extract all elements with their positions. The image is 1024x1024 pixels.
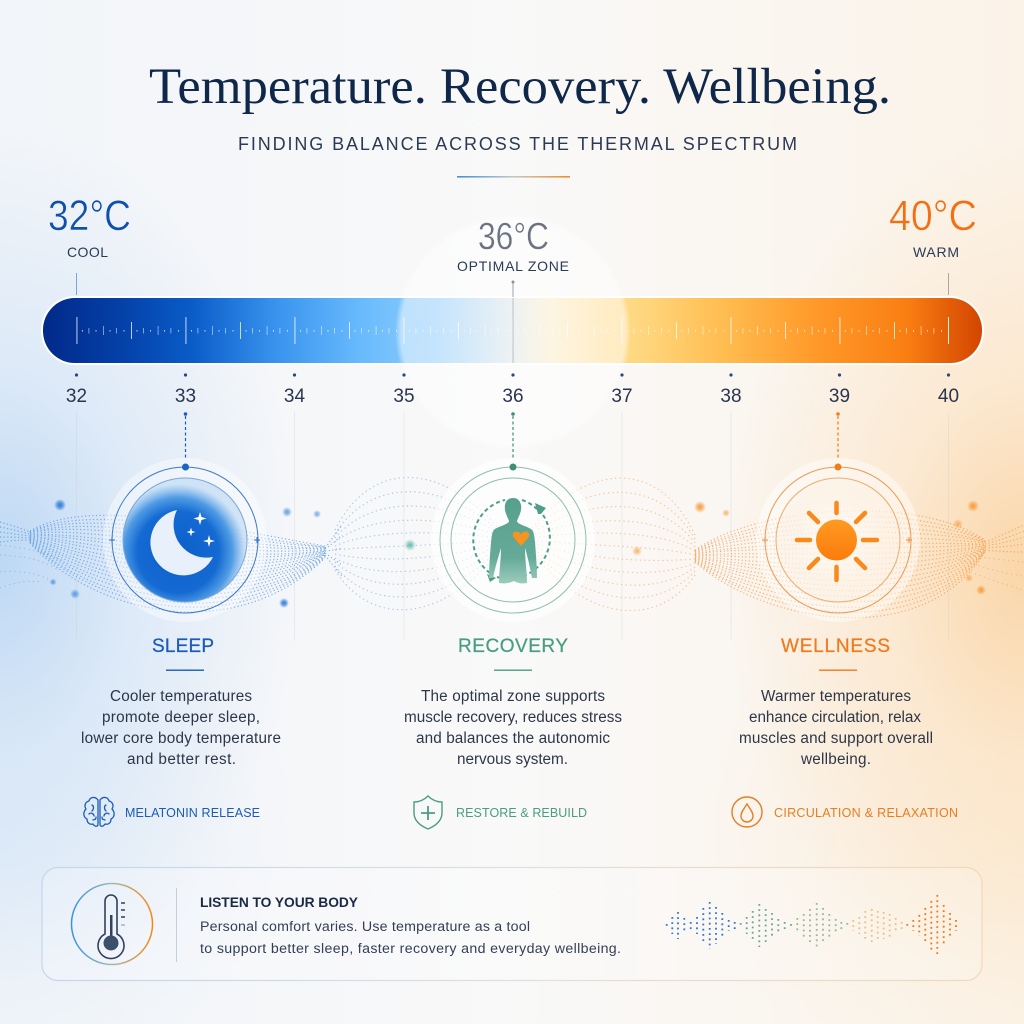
- title: Temperature. Recovery. Wellbeing.: [149, 59, 891, 115]
- temperature scale bar: [41, 214, 984, 450]
- scale numbers: 32: [66, 386, 87, 407]
- label: 36°C optimal zone: OPTIMAL ZONE: [457, 258, 569, 274]
- scale numbers: 35: [393, 386, 415, 407]
- scale numbers: 37: [611, 386, 633, 407]
- text: recovery description: The optimal zone supports: [421, 688, 605, 705]
- label: 40°C warm: [889, 192, 977, 260]
- icon: human figure with heart: [489, 498, 537, 583]
- label: 32°C cool: [48, 192, 131, 260]
- wave: orange lower-right tail: [960, 555, 1024, 590]
- scale numbers: 40: [938, 386, 959, 407]
- scale numbers: 38: [720, 386, 742, 407]
- text: wellness description: Warmer temperatures: [761, 688, 911, 705]
- wave: pale orange centre bulge: [530, 478, 695, 611]
- label: 36°C optimal zone: [457, 216, 569, 274]
- panel: wellness icon: [756, 412, 920, 622]
- tag: circulation and relaxation: CIRCULATION & RELAXATION: [774, 806, 958, 820]
- icon: sun: [797, 503, 877, 580]
- icon: shield: [414, 796, 442, 829]
- panel: recovery icon: [431, 412, 595, 622]
- text: wellness description: [739, 688, 933, 768]
- icon: thermometer: [72, 884, 152, 964]
- label: 40°C warm: WARM: [913, 244, 959, 260]
- label: 40°C warm: 40°C: [889, 192, 977, 240]
- tag: melatonin release: MELATONIN RELEASE: [125, 806, 260, 820]
- wave: pale blue centre bulge: [335, 478, 500, 610]
- text: callout: LISTEN TO YOUR BODY: [200, 895, 358, 910]
- heading: sleep: [152, 636, 214, 671]
- text: recovery description: nervous system.: [457, 751, 568, 768]
- scale numbers: 33: [175, 386, 196, 407]
- label: 32°C cool: 32°C: [48, 192, 131, 240]
- text: recovery description: [404, 688, 622, 768]
- panel: sleep icon: [103, 412, 267, 622]
- wave: orange mesh: [695, 511, 1024, 618]
- text: sleep description: promote deeper sleep,: [102, 709, 260, 726]
- text: wellness description: enhance circulation, relax: [749, 709, 921, 726]
- subtitle: FINDING BALANCE ACROSS THE THERMAL SPECTRUM: [238, 134, 797, 154]
- text: callout: to support better sleep, faster recovery and everyday wellbeing.: [200, 941, 621, 957]
- tag: restore and rebuild: RESTORE & REBUILD: [456, 806, 587, 820]
- icon: circular arrows: [473, 500, 550, 582]
- heading: wellness: [781, 636, 890, 671]
- label: 32°C cool: COOL: [67, 244, 108, 260]
- text: sleep description: and better rest.: [127, 751, 236, 768]
- particles: [50, 499, 986, 608]
- panel: listen to your body: [42, 868, 982, 980]
- text: sleep description: [81, 688, 281, 768]
- text: callout: [200, 895, 621, 957]
- text: sleep description: lower core body temperature: [81, 730, 281, 747]
- label: 36°C optimal zone: 36°C: [478, 216, 549, 258]
- text: sleep description: Cooler temperatures: [110, 688, 252, 705]
- scale numbers: [66, 373, 959, 407]
- scale numbers: 34: [284, 386, 305, 407]
- text: recovery description: and balances the autonomic: [416, 730, 610, 747]
- scale numbers: 36: [502, 386, 524, 407]
- heading: wellness: WELLNESS: [781, 636, 890, 657]
- wave: blue mesh: [0, 515, 342, 612]
- chart: dotted sound wave: [667, 895, 956, 956]
- wave: blue lower-left tail: [0, 545, 62, 588]
- icon: moon and stars: [150, 510, 215, 575]
- text: wellness description: wellbeing.: [800, 751, 871, 768]
- text: wellness description: muscles and support overall: [739, 730, 933, 747]
- text: recovery description: muscle recovery, reduces stress: [404, 709, 622, 726]
- heading: recovery: [458, 636, 568, 671]
- heading: recovery: RECOVERY: [458, 636, 568, 657]
- icon: drop in circle: [732, 797, 762, 827]
- text: callout: Personal comfort varies. Use temperature as a tool: [200, 919, 530, 935]
- icon: brain: [84, 797, 114, 826]
- scale numbers: 39: [829, 386, 850, 407]
- heading: sleep: SLEEP: [152, 636, 214, 657]
